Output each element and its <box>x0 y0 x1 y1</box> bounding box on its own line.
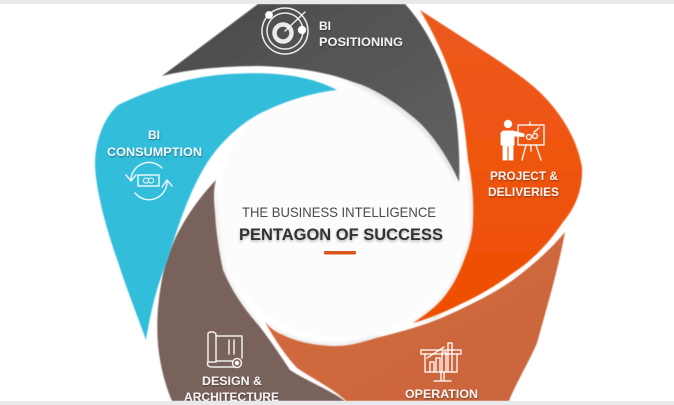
label: BI positioning: BI <box>319 19 331 33</box>
label: project and deliveries: PROJECT & <box>490 169 558 183</box>
panel: project and deliveries segment <box>413 10 582 323</box>
icon: radar target <box>262 8 308 54</box>
accent bar <box>324 251 356 254</box>
icon: presenter at board <box>501 120 544 160</box>
label: design and architecture: DESIGN & <box>202 374 262 388</box>
panel: operation segment <box>265 232 565 401</box>
label: project and deliveries <box>488 169 559 199</box>
label: BI consumption <box>107 128 202 159</box>
label: project and deliveries: DELIVERIES <box>488 185 559 199</box>
panel: BI consumption segment <box>95 73 337 340</box>
top grey band <box>0 0 674 4</box>
bottom grey band <box>0 401 674 405</box>
label: BI consumption: CONSUMPTION <box>107 145 202 159</box>
label: design and architecture <box>184 374 279 404</box>
label: BI positioning <box>319 19 403 49</box>
label: design and architecture: ARCHITECTURE <box>184 390 279 404</box>
centre circle shading <box>203 76 487 357</box>
panel: BI positioning segment <box>162 4 459 182</box>
label: operation: OPERATION <box>405 387 478 401</box>
heading line two: PENTAGON OF SUCCESS <box>239 226 443 244</box>
heading line one: THE BUSINESS INTELLIGENCE <box>242 204 436 220</box>
icon: blueprint scroll <box>207 332 242 368</box>
title <box>239 204 443 254</box>
label: BI positioning: POSITIONING <box>319 35 403 49</box>
icon: money cycle <box>126 162 172 200</box>
label: BI consumption: BI <box>148 128 160 142</box>
panel: design and architecture segment <box>157 180 345 404</box>
icon: chart on presentation board <box>421 343 461 381</box>
